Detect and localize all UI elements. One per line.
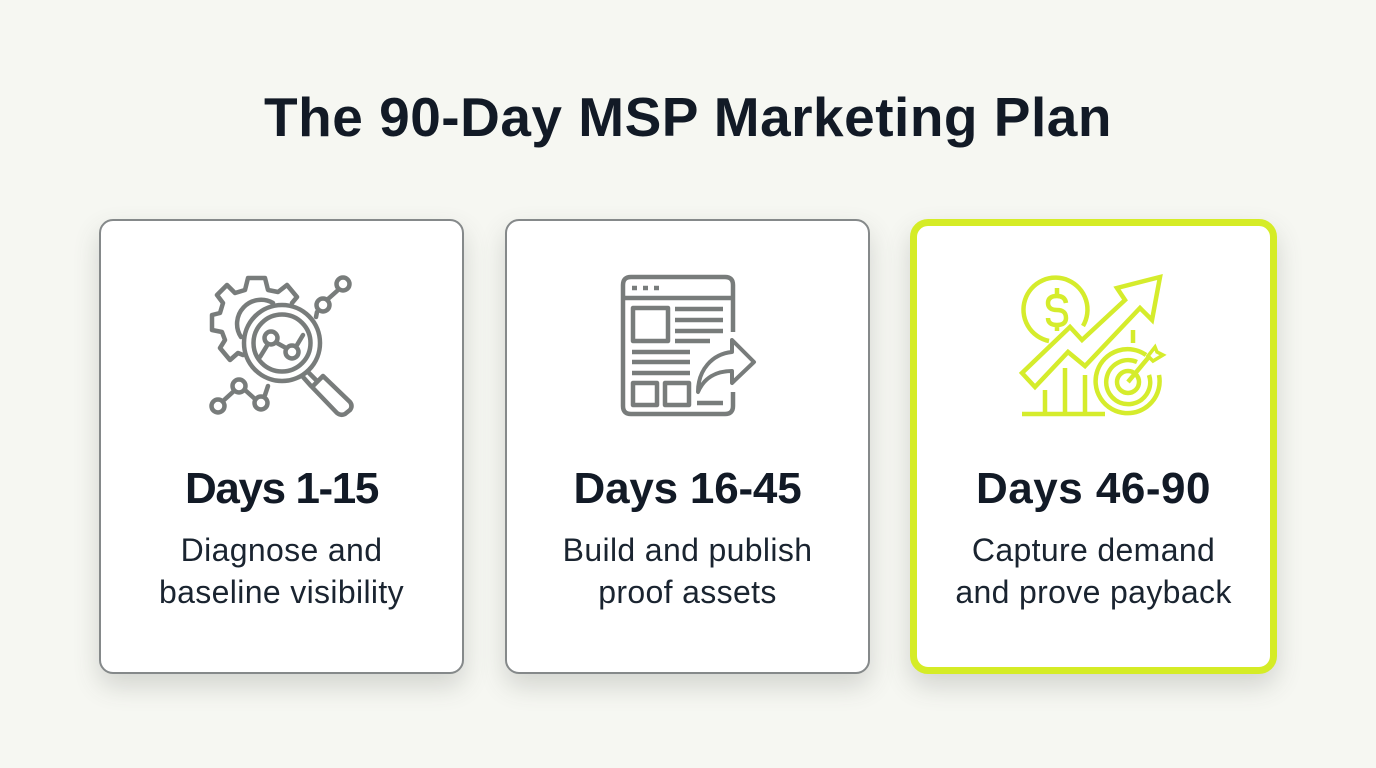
text: days 46-90 <box>955 532 1232 610</box>
heading: days 1-15: Days 1-15 <box>185 464 378 513</box>
panel: days 16-45 <box>505 219 870 674</box>
panel: days 1-15 <box>99 219 464 674</box>
text: days 16-45: Build and publish <box>563 532 812 568</box>
icon: gear, magnifier and data points <box>212 278 352 415</box>
icon: web page with share arrow <box>623 277 754 414</box>
text: days 16-45 <box>563 532 812 610</box>
text: days 1-15: baseline visibility <box>159 574 404 610</box>
text: days 1-15 <box>159 532 404 610</box>
icon: dollar coin, growth arrow, bars and target <box>1022 277 1163 414</box>
heading: days 16-45: Days 16-45 <box>574 464 801 513</box>
text: days 1-15: Diagnose and <box>181 532 382 568</box>
text: days 46-90: and prove payback <box>955 574 1232 610</box>
heading: days 46-90: Days 46-90 <box>976 464 1211 513</box>
text: days 16-45: proof assets <box>598 574 777 610</box>
title: The 90-Day MSP Marketing Plan <box>264 86 1112 148</box>
text: days 46-90: Capture demand <box>972 532 1215 568</box>
panel: days 46-90 <box>910 219 1277 674</box>
